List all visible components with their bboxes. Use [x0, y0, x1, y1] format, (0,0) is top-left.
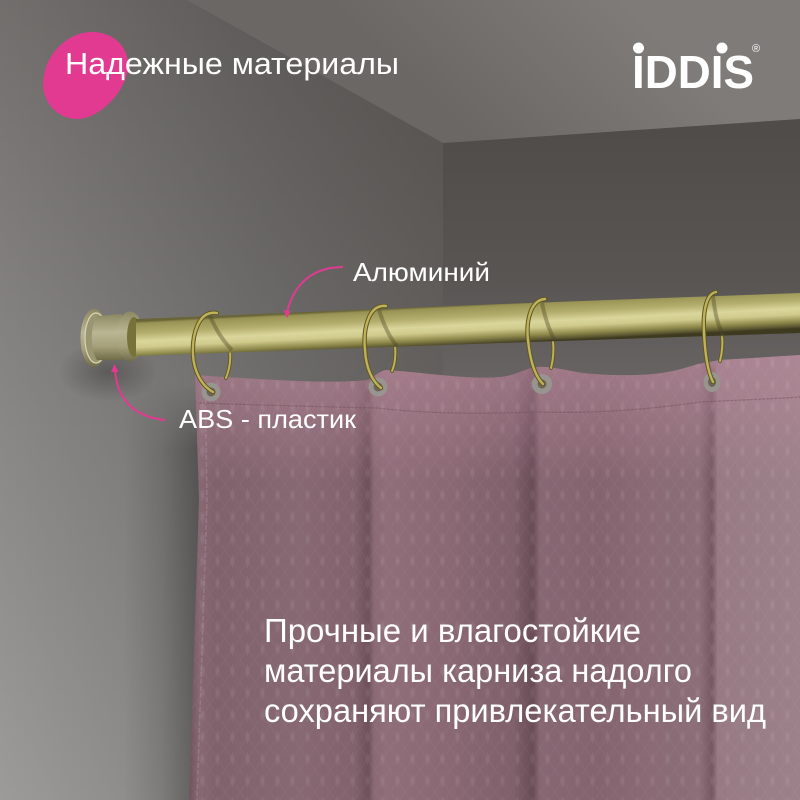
ring shadows on rod [210, 296, 724, 350]
description text [264, 612, 766, 729]
left wall [0, 0, 445, 800]
curtain top tint [195, 355, 800, 500]
logo dot 1 [633, 42, 644, 54]
logo wordmark: IDDIS [632, 46, 754, 98]
title: Надежные материалы [65, 46, 399, 81]
description text: сохраняют привлекательный вид [264, 692, 766, 729]
callout label: aluminium: Алюминий [353, 257, 490, 287]
ring 1 [193, 313, 217, 392]
outer flange [80, 309, 108, 367]
description text: Прочные и влагостойкие [264, 612, 641, 649]
callout arrow: aluminium [284, 267, 343, 318]
description text: материалы карниза надолго [264, 652, 692, 689]
ring 3 [528, 299, 545, 384]
wall mount flange [80, 309, 144, 367]
back parts of rings [226, 335, 722, 378]
ring 4 [704, 292, 716, 382]
curtain fabric [189, 355, 800, 800]
flange rim [85, 313, 107, 363]
logo: IDDIS [632, 42, 760, 98]
cylinder body [92, 314, 122, 360]
logo dot 2 [716, 42, 728, 54]
badge blob [43, 32, 128, 119]
rod shadow on wall [58, 342, 158, 402]
collar opening [127, 317, 141, 357]
curtain weave pattern [189, 355, 800, 800]
shadow beside curtain [146, 402, 199, 800]
curtain stitching [199, 397, 800, 413]
grommets [202, 372, 720, 402]
curtain side hem [197, 385, 207, 800]
front parts of rings [193, 292, 716, 392]
ring 2 [365, 306, 386, 388]
callout label: ABS plastic: ABS - пластик [179, 404, 357, 434]
callout arrow: ABS plastic [111, 364, 165, 420]
right wall [443, 110, 800, 410]
curtain rod [136, 293, 800, 356]
collar [116, 312, 144, 362]
ceiling [187, 0, 800, 143]
curtain [189, 355, 800, 800]
registered mark: ® [752, 43, 760, 55]
